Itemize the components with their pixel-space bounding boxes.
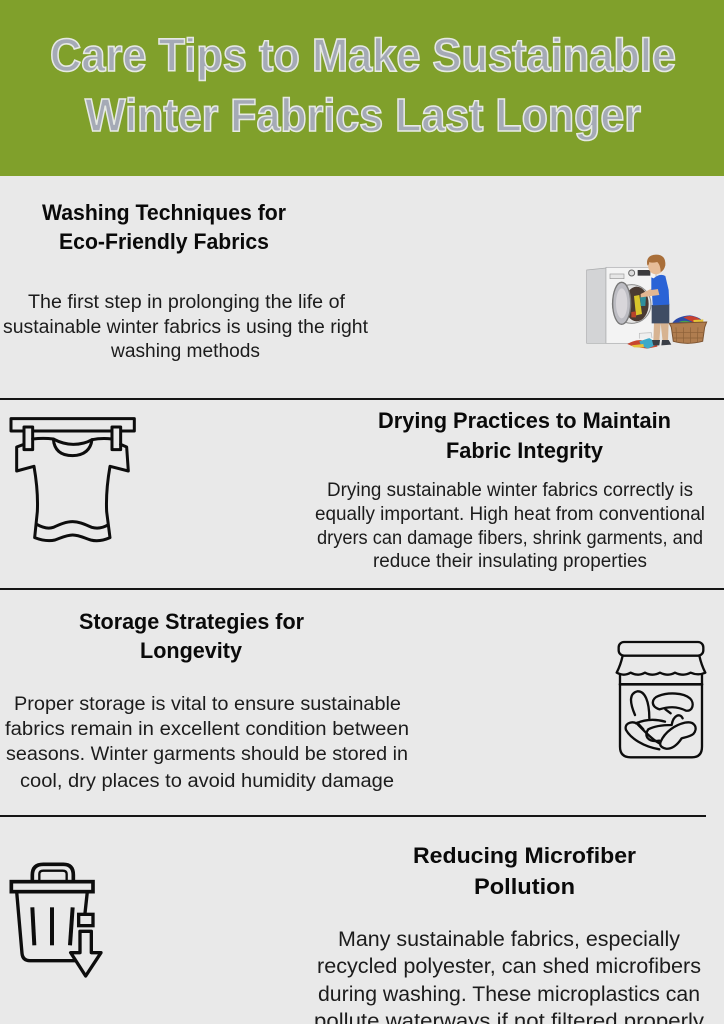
text block: drying: dryers can damage fibers, shrink garments, and [317,528,703,549]
text block: drying: reduce their insulating properties [373,551,647,572]
heading: microfiber [413,843,636,899]
heading: microfiber: Reducing Microfiber [413,843,636,868]
text block: microfiber [314,928,705,1024]
heading: washing: Eco-Friendly Fabrics [59,229,269,254]
text block: microfiber: Many sustainable fabrics, especially [338,928,681,951]
text block: washing: washing methods [110,341,260,362]
panel: storage strategies [5,609,705,792]
text block: washing: sustainable winter fabrics is using the right [3,317,369,338]
text block: microfiber: recycled polyester, can shed microfibers [317,955,701,978]
icon: jar [617,642,705,757]
title: Care Tips to Make Sustainable [50,29,676,81]
text block: storage: cool, dry places to avoid humidity damage [20,771,394,792]
heading: washing [42,200,286,254]
text block: storage: fabrics remain in excellent condition between [5,719,409,740]
panel: reducing microfiber pollution [11,843,705,1024]
heading: microfiber: Pollution [474,874,575,899]
header banner [0,0,724,176]
heading: storage: Storage Strategies for [79,609,304,634]
text block: storage: seasons. Winter garments should be stored in [6,744,408,765]
panel: washing techniques [3,200,707,362]
title [50,29,676,141]
icon: boy at washing machine with laundry basket [587,255,707,349]
text block: storage: Proper storage is vital to ensure sustainable [14,694,401,715]
text block: drying: Drying sustainable winter fabrics correctly is [327,480,693,501]
icon: trash can with down arrow [11,864,101,976]
text block: storage [5,694,409,792]
heading: washing: Washing Techniques for [42,200,286,225]
heading: storage: Longevity [140,638,243,663]
text block: drying: equally important. High heat from conventional [315,504,705,525]
text block: microfiber: during washing. These microplastics can [318,983,700,1006]
icon: t-shirt on clothes line [11,419,134,541]
divider [0,398,724,400]
text block: washing: The first step in prolonging the life of [28,292,346,313]
heading: drying [378,408,671,463]
heading: drying: Fabric Integrity [446,438,604,463]
text block: drying [315,480,705,572]
title: Winter Fabrics Last Longer [85,89,641,141]
panel: drying practices [11,408,705,572]
heading: storage [79,609,304,663]
divider [0,815,706,817]
heading: drying: Drying Practices to Maintain [378,408,671,433]
text block: washing [3,292,369,362]
divider [0,588,724,590]
